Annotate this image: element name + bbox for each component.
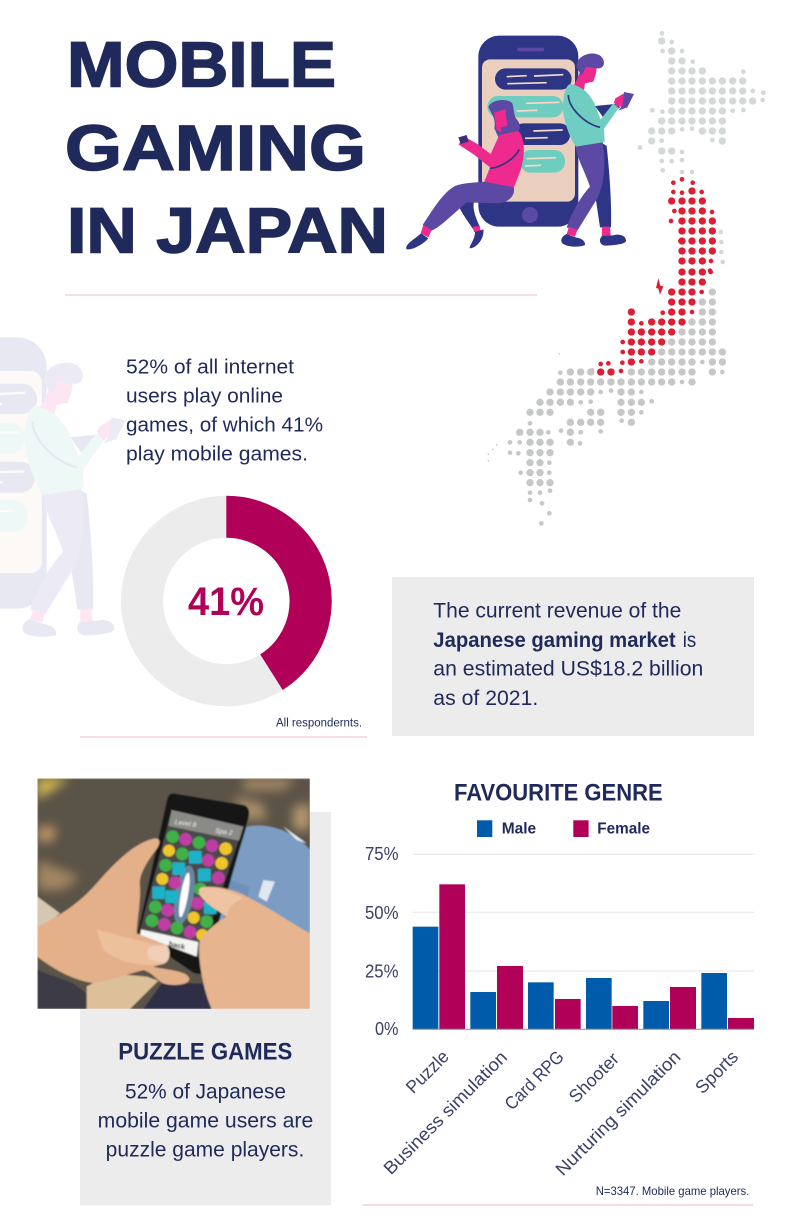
y axis labels: 50%: [365, 903, 398, 923]
panel: market revenue: The current revenue of the: [433, 600, 681, 623]
panel: puzzle games: 52% of Japanese: [125, 1080, 286, 1103]
photo: hands playing puzzle game on a phone: Spa 2: [215, 828, 233, 837]
panel: market revenue: as of 2021.: [433, 687, 538, 710]
map: southern region: [488, 292, 722, 523]
donut chart: 41%: 41%: [188, 580, 264, 624]
x axis labels: Card RPG: [501, 1047, 568, 1114]
x axis labels: Nurturing simulation: [552, 1047, 685, 1180]
chart title: FAVOURITE GENRE: [454, 780, 663, 807]
icon: large smartphone: [478, 36, 578, 227]
panel: puzzle games: mobile game users are: [98, 1110, 313, 1133]
note: sample size: N=3347. Mobile game players.: [596, 1184, 749, 1198]
y axis labels: [365, 844, 398, 1039]
x axis labels: Puzzle: [402, 1046, 453, 1097]
map: northern region: [640, 33, 763, 262]
legend: [477, 820, 650, 837]
illustration: people with phone: [406, 36, 634, 249]
text: online gaming stat: users play online: [126, 385, 283, 408]
title: GAMING: [65, 112, 366, 184]
text: online gaming stat: 52% of all internet: [126, 355, 294, 378]
x axis labels: Business simulation: [380, 1047, 511, 1179]
title: MOBILE: [67, 29, 336, 101]
panel: puzzle games: puzzle game players.: [106, 1139, 304, 1162]
y axis labels: 25%: [365, 961, 398, 981]
panel: market revenue: an estimated US$18.2 billion: [433, 658, 703, 681]
photo: hands playing puzzle game on a phone: back: [168, 939, 187, 952]
text: online gaming stat: play mobile games.: [126, 443, 308, 466]
x axis labels: Shooter: [565, 1049, 623, 1107]
figure: standing man: [561, 54, 634, 247]
panel: puzzle games: [80, 812, 331, 1205]
note: all respondents: All respondernts.: [276, 718, 362, 730]
bar chart: favourite genre: [365, 844, 754, 1180]
text: online gaming stat: games, of which 41%: [126, 414, 323, 437]
panel: market revenue: Japanese gaming market: [433, 629, 676, 652]
title: IN JAPAN: [67, 194, 388, 266]
map of Japan: [488, 33, 763, 523]
photo: hands playing puzzle game on a phone: [37, 778, 310, 1009]
panel: market revenue: [392, 577, 754, 736]
panel: market revenue: is: [683, 629, 696, 652]
legend: Female: [597, 820, 650, 837]
panel: puzzle games: PUZZLE GAMES: [118, 1038, 292, 1065]
bars: [413, 884, 754, 1029]
title: [65, 29, 388, 266]
text: online gaming stat: [126, 355, 323, 466]
map: central red region: [592, 179, 712, 372]
legend: Male: [502, 820, 536, 837]
x axis labels: Sports: [691, 1047, 742, 1098]
y axis labels: 75%: [365, 844, 398, 864]
ghost illustration: man and phone: [0, 337, 126, 637]
y axis labels: 0%: [375, 1019, 398, 1039]
x axis labels: [380, 1046, 742, 1180]
figure: sitting woman: [406, 100, 524, 249]
photo: hands playing puzzle game on a phone: Level 8: [174, 819, 197, 829]
donut chart: 41%: [142, 496, 332, 690]
